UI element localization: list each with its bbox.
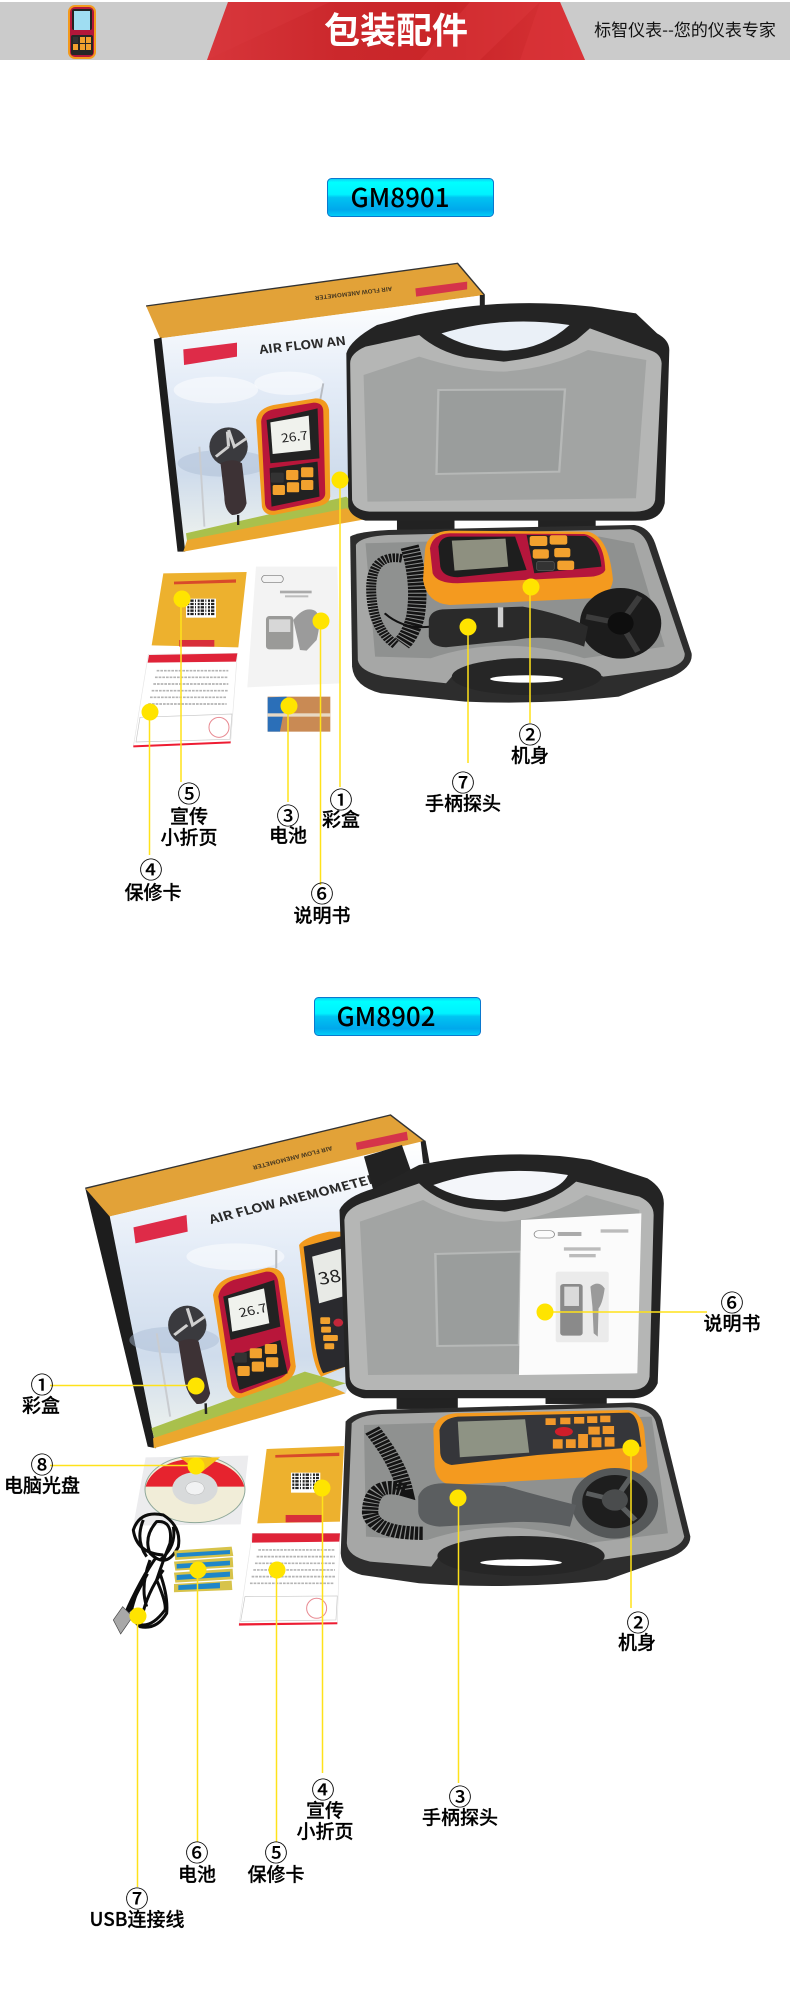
callout 1: colour box — [322, 472, 360, 832]
callout 5: warranty card — [247, 1562, 305, 1887]
callout 6: manual: ⑥ — [720, 1284, 744, 1318]
callout 6: manual: 说明书 — [293, 901, 351, 928]
meter on box — [256, 398, 330, 515]
red title ribbon — [207, 2, 585, 60]
warranty card — [239, 1533, 340, 1626]
callout 4: warranty card — [124, 704, 182, 905]
callout 7: probe: 手柄探头 — [425, 789, 501, 816]
photo: GM8901 printed accessories — [133, 567, 341, 747]
callout 6: manual — [293, 612, 351, 928]
heading: GM8902 — [314, 997, 480, 1036]
callout 5: warranty card: 保修卡 — [247, 1860, 305, 1887]
manual in lid — [519, 1213, 641, 1375]
callout 7: probe — [425, 618, 501, 816]
callout 4: warranty card: 保修卡 — [124, 878, 182, 905]
callout 4: leaflet: 宣传 — [306, 1796, 344, 1823]
hard case base — [350, 525, 692, 703]
callout 1: colour box: ① — [30, 1366, 54, 1400]
heading: GM8901: GM8901 — [350, 178, 450, 215]
heading: GM8901 — [328, 178, 494, 216]
header banner — [0, 2, 790, 60]
callout 6: batteries: 电池 — [178, 1860, 216, 1887]
callout 1: colour box — [22, 1366, 204, 1418]
callout 3: probe — [422, 1490, 498, 1830]
software CD — [133, 1456, 248, 1526]
colour box: 38 — [315, 1263, 343, 1290]
callout 7: usb cable: ⑦ — [126, 1880, 148, 1914]
callout 2: body: 机身 — [511, 741, 549, 768]
usb cable — [113, 1514, 179, 1634]
promotional leaflet — [152, 572, 247, 647]
manual — [247, 567, 341, 687]
callout 5: leaflet — [160, 590, 218, 850]
colour box — [85, 1115, 430, 1448]
callout 7: probe: ⑦ — [452, 764, 474, 798]
callout 7: usb cable: USB连接线 — [90, 1905, 184, 1932]
meter body — [433, 1410, 648, 1485]
callout 5: warranty card: ⑤ — [264, 1834, 288, 1868]
callout 2: body: ② — [626, 1604, 650, 1638]
callout 8: computer disc: 电脑光盘 — [4, 1471, 80, 1498]
callout 5: leaflet: ⑤ — [178, 775, 200, 809]
callout 4: leaflet: ④ — [312, 1771, 334, 1805]
icon: handheld anemometer — [68, 5, 96, 59]
batteries — [174, 1547, 233, 1592]
meter body — [423, 531, 613, 605]
callout 3: battery: 电池 — [269, 821, 307, 848]
photo: GM8902 colour box and case — [85, 1115, 690, 1586]
photo: GM8902 accessories — [113, 1446, 344, 1634]
callout 6: manual: 说明书 — [703, 1309, 761, 1336]
callout 3: battery: ③ — [276, 797, 300, 831]
warranty card — [133, 653, 237, 747]
colour box: 26.7 — [280, 426, 309, 446]
slogan: 标智仪表--您的仪表专家 — [594, 16, 776, 41]
callout 4: leaflet: 小折页 — [296, 1817, 354, 1844]
callout 8: computer disc — [4, 1446, 204, 1498]
callout 6: manual — [536, 1284, 761, 1336]
callout 4: leaflet — [296, 1480, 354, 1844]
anemometer on box — [209, 427, 248, 466]
callout 2: body: ② — [518, 716, 542, 750]
callout 1: colour box: ① — [330, 781, 352, 815]
callout 4: warranty card: ④ — [140, 851, 162, 885]
callout 3: probe: ③ — [448, 1778, 472, 1812]
callout 8: computer disc: ⑧ — [30, 1446, 54, 1480]
callout 5: leaflet: 小折页 — [160, 823, 218, 850]
callouts: GM8901 — [124, 472, 549, 928]
callout 2: body: 机身 — [618, 1628, 656, 1655]
probe — [572, 1468, 658, 1539]
hard case lid — [346, 303, 669, 530]
callouts: GM8902 — [4, 1284, 761, 1932]
photo: GM8901 colour box and case — [146, 263, 692, 703]
colour box: 26.7 — [236, 1298, 269, 1321]
colour box: AIR FLOW ANEMOMETER — [314, 285, 394, 302]
hard case lid — [339, 1145, 664, 1409]
callout 2: body — [511, 578, 549, 768]
callout 3: battery — [269, 698, 307, 848]
callout 6: manual: ⑥ — [310, 875, 334, 909]
hard case base — [341, 1403, 690, 1586]
coiled cable — [370, 1430, 423, 1533]
meter 2 on box — [299, 1232, 346, 1377]
callout 7: usb cable — [90, 1608, 184, 1932]
callout 3: probe: 手柄探头 — [422, 1803, 498, 1830]
callout 1: colour box: 彩盒 — [22, 1391, 60, 1418]
probe — [580, 588, 661, 659]
callout 6: batteries: ⑥ — [186, 1834, 208, 1868]
battery — [268, 697, 330, 732]
callout 1: colour box: 彩盒 — [322, 805, 360, 832]
colour box: AIR FLOW AN — [257, 331, 347, 358]
callout 5: leaflet: 宣传 — [170, 802, 208, 829]
coiled cable — [402, 547, 417, 643]
promotional leaflet — [257, 1446, 344, 1523]
heading: GM8902: GM8902 — [336, 997, 436, 1034]
callout 6: batteries — [178, 1562, 216, 1887]
meter 1 on box — [213, 1268, 296, 1398]
colour box: AIR FLOW ANEMOMETER — [205, 1168, 380, 1228]
callout 2: body — [618, 1440, 656, 1655]
title: 包装配件 — [324, 2, 468, 54]
colour box — [146, 263, 485, 552]
anemometer on box — [168, 1306, 206, 1344]
colour box: AIR FLOW ANEMOMETER — [251, 1144, 335, 1172]
